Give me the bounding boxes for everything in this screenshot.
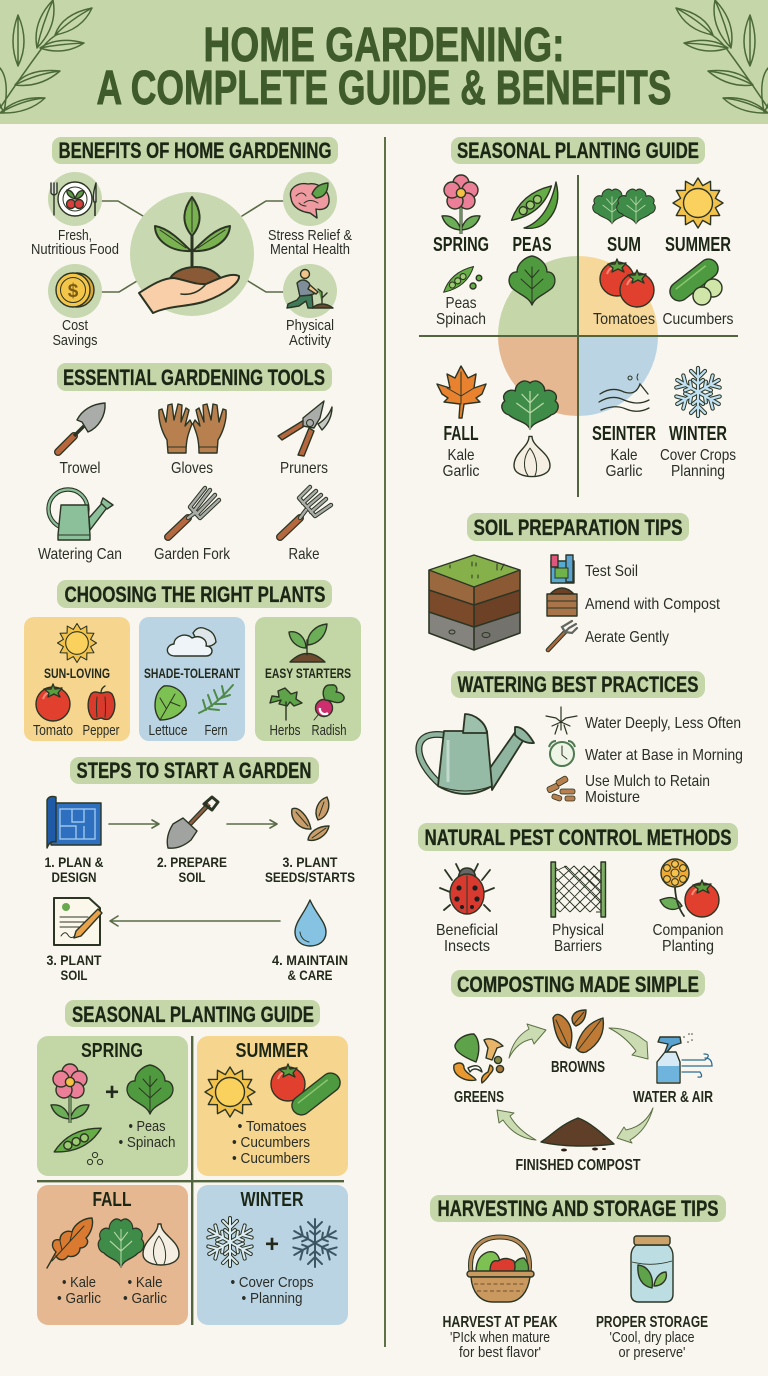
card: easy starters: Radish [312, 722, 346, 739]
step 2: prepare soil: 2. PREPARE [157, 854, 227, 870]
tip: amend with compost [547, 588, 720, 616]
quadrant: fall: • Kale [128, 1274, 162, 1291]
card: sun-loving: Pepper [82, 722, 120, 739]
tool: watering can [38, 490, 122, 563]
benefit: cost savings [48, 264, 102, 349]
method: physical barriers: Barriers [554, 938, 602, 955]
benefit: stress relief [268, 172, 352, 258]
quadrant: fall [37, 1185, 188, 1325]
heading: steps: STEPS TO START A GARDEN [76, 758, 312, 783]
central plant in hand [130, 192, 254, 316]
season: winter [592, 368, 736, 480]
tool: rake: Rake [288, 546, 320, 563]
decorative leaves right [676, 0, 768, 113]
arrow: step 2 to 3 [227, 820, 277, 828]
method: beneficial insects [436, 864, 498, 955]
season: summer [593, 178, 734, 328]
season: summer: SUMMER [665, 234, 731, 256]
tool: garden fork: Garden Fork [154, 546, 231, 563]
arrow: water to compost [617, 1108, 653, 1143]
tool: garden fork [154, 488, 231, 563]
seasonal colour wheel [498, 256, 658, 416]
tip: proper storage: 'Cool, dry place [610, 1329, 694, 1346]
step 2: prepare soil [157, 797, 227, 885]
card: sun-loving: SUN-LOVING [44, 665, 110, 681]
tip: use mulch [546, 773, 710, 806]
stage: browns: BROWNS [551, 1059, 605, 1076]
stage: finished compost: FINISHED COMPOST [516, 1157, 641, 1174]
benefit: cost savings: Savings [52, 332, 98, 349]
tip: harvest at peak: 'PIck when mature [450, 1329, 550, 1346]
tool: pruners [278, 401, 332, 477]
card: sun-loving: Tomato [33, 722, 73, 739]
step: plant soil: 3. PLANT [46, 952, 102, 968]
heading: seasonal left: SEASONAL PLANTING GUIDE [72, 1002, 314, 1027]
season: winter: SEINTER [592, 423, 656, 445]
heading: watering: WATERING BEST PRACTICES [458, 672, 698, 697]
stage: browns [551, 1010, 605, 1076]
step 1: plan and design: DESIGN [52, 869, 96, 885]
method: companion planting: Companion [652, 922, 724, 939]
quadrant: spring [37, 1036, 188, 1176]
panel: seasonal grid (left) [37, 1000, 348, 1325]
stage: greens: GREENS [454, 1089, 504, 1106]
quadrant: fall: • Kale [62, 1274, 96, 1291]
panel: watering [419, 671, 743, 806]
method: physical barriers [551, 862, 606, 955]
benefit: fresh food: Nutritious Food [31, 241, 119, 258]
method: companion planting [652, 859, 724, 955]
step 2: prepare soil: SOIL [178, 869, 206, 885]
panel: pest control [418, 823, 738, 955]
season: fall [437, 366, 558, 480]
stage: finished compost [516, 1118, 641, 1174]
tip: water at base in morning: Water at Base in Morning [585, 747, 743, 764]
card: easy starters: EASY STARTERS [265, 665, 351, 681]
card: shade-tolerant [139, 617, 245, 741]
heading: plants: CHOOSING THE RIGHT PLANTS [64, 582, 326, 607]
season: winter: Planning [671, 463, 725, 480]
method: companion planting: Planting [662, 938, 714, 955]
quadrant: winter: • Planning [242, 1290, 302, 1307]
benefit: stress relief: Stress Relief & [268, 227, 352, 244]
panel: benefits [31, 137, 352, 349]
arrow: greens to browns [509, 1024, 546, 1058]
tool: rake [280, 487, 331, 563]
quadrant: summer: • Tomatoes [238, 1118, 306, 1135]
season: winter: Cover Crops [660, 447, 736, 464]
quadrant: fall: • Garlic [123, 1290, 167, 1307]
tool: gloves: Gloves [171, 460, 213, 477]
decorative leaves left [0, 0, 92, 113]
benefit: physical activity [283, 264, 337, 349]
step: plant soil: SOIL [60, 967, 88, 983]
heading: seasonal right: SEASONAL PLANTING GUIDE [457, 138, 699, 163]
season: summer: Tomatoes [593, 311, 655, 328]
quadrant: fall: FALL [92, 1189, 132, 1211]
stage: water and air [633, 1033, 713, 1106]
tool: gloves [159, 404, 226, 477]
step 4: maintain and care: 4. MAINTAIN [272, 952, 348, 968]
quadrant: spring: • Peas [128, 1118, 166, 1135]
step 3: seeds: 3. PLANT [282, 854, 338, 870]
quadrant: fall: • Garlic [57, 1290, 101, 1307]
quadrant: spring: + [105, 1079, 119, 1106]
tip: water at base in morning [549, 741, 743, 766]
season: spring: Peas [446, 295, 476, 312]
method: beneficial insects: Insects [444, 938, 490, 955]
season: summer: Cucumbers [662, 311, 734, 328]
tip: harvest at peak [442, 1237, 558, 1361]
season: winter: Kale [610, 447, 638, 464]
card: shade-tolerant: Fern [204, 722, 228, 739]
tip: harvest at peak: HARVEST AT PEAK [442, 1314, 558, 1331]
arrow: step 4 back to plant soil [110, 916, 280, 926]
method: beneficial insects: Beneficial [436, 922, 498, 939]
quadrant: summer: SUMMER [236, 1040, 309, 1062]
tip: water deeply: Water Deeply, Less Often [585, 715, 741, 732]
step: plant soil [46, 898, 102, 983]
heading: composting: COMPOSTING MADE SIMPLE [457, 972, 699, 997]
stage: water and air: WATER & AIR [633, 1089, 713, 1106]
season: spring: PEAS [512, 234, 552, 256]
panel: steps [44, 757, 355, 983]
season: winter: WINTER [669, 423, 727, 445]
stage: greens [454, 1034, 504, 1106]
benefit: fresh food: Fresh, [58, 227, 92, 244]
method: physical barriers: Physical [552, 922, 604, 939]
card: shade-tolerant: SHADE-TOLERANT [144, 665, 240, 681]
season: fall: FALL [444, 423, 478, 445]
header banner [0, 0, 768, 124]
step 1: plan and design [44, 796, 104, 885]
quadrant: winter [197, 1185, 348, 1325]
arrow: browns to water [609, 1028, 648, 1059]
heading: soil: SOIL PREPARATION TIPS [474, 515, 682, 540]
step 3: seeds [265, 797, 355, 885]
tip: aerate gently: Aerate Gently [585, 629, 669, 646]
tip: use mulch: Use Mulch to Retain [585, 773, 710, 790]
benefit: fresh food [31, 172, 119, 258]
season: spring: Spinach [436, 311, 486, 328]
title [96, 19, 672, 115]
tip: aerate gently [548, 621, 669, 650]
arrow: compost to greens [497, 1110, 536, 1140]
tool: pruners: Pruners [280, 460, 328, 477]
panel: harvesting [430, 1195, 726, 1361]
quadrant: summer [197, 1036, 348, 1176]
benefit: cost savings: $ [68, 281, 79, 302]
panel: composting [451, 970, 713, 1174]
card: easy starters: Herbs [270, 722, 300, 739]
season: summer: SUM [607, 234, 641, 256]
season: spring: SPRING [433, 234, 489, 256]
quadrant: summer: • Cucumbers [232, 1150, 310, 1167]
panel: tools [38, 363, 332, 563]
step 4: maintain and care [272, 900, 348, 983]
card: sun-loving [24, 617, 130, 741]
step 4: maintain and care: & CARE [288, 967, 332, 983]
title: HOME GARDENING: [204, 19, 564, 72]
heading: benefits: BENEFITS OF HOME GARDENING [58, 138, 332, 163]
benefit: physical activity: Physical [286, 317, 334, 334]
card: shade-tolerant: Lettuce [148, 722, 188, 739]
panel: choosing plants [24, 580, 361, 741]
season: spring [433, 175, 558, 328]
column divider [384, 137, 386, 1347]
tip: use mulch: Moisture [585, 789, 640, 806]
heading: tools: ESSENTIAL GARDENING TOOLS [63, 365, 325, 390]
tip: test soil: Test Soil [585, 563, 638, 580]
season: winter: Garlic [606, 463, 642, 480]
tip: test soil [551, 555, 638, 583]
quadrant: spring: • Spinach [118, 1134, 176, 1151]
tip: proper storage: PROPER STORAGE [596, 1314, 708, 1331]
step 3: seeds: SEEDS/STARTS [265, 869, 355, 885]
season: fall: Kale [448, 447, 475, 464]
icon: large watering can [419, 714, 534, 794]
season: fall: Garlic [442, 463, 480, 480]
tip: amend with compost: Amend with Compost [585, 596, 720, 613]
quadrant: winter: WINTER [240, 1189, 304, 1211]
step 1: plan and design: 1. PLAN & [44, 854, 104, 870]
panel: seasonal guide (right) [419, 137, 738, 497]
tool: trowel [58, 403, 105, 477]
icon: soil cube [429, 555, 520, 650]
tool: watering can: Watering Can [38, 546, 122, 563]
benefit: cost savings: Cost [62, 317, 89, 334]
quadrant: summer: • Cucumbers [232, 1134, 310, 1151]
benefit: physical activity: Activity [289, 332, 331, 349]
quadrant: spring: SPRING [81, 1040, 143, 1062]
tip: proper storage [596, 1236, 708, 1361]
quadrant: winter: + [265, 1231, 279, 1258]
quadrant: winter: • Cover Crops [230, 1274, 314, 1291]
tool: trowel: Trowel [60, 460, 100, 477]
card: easy starters [255, 617, 361, 741]
panel: soil preparation [429, 513, 720, 650]
tip: harvest at peak: for best flavor' [459, 1344, 541, 1361]
arrow: step 1 to 2 [109, 820, 159, 828]
tip: water deeply [546, 707, 741, 734]
benefit: stress relief: Mental Health [270, 241, 350, 258]
tip: proper storage: or preserve' [618, 1344, 686, 1361]
